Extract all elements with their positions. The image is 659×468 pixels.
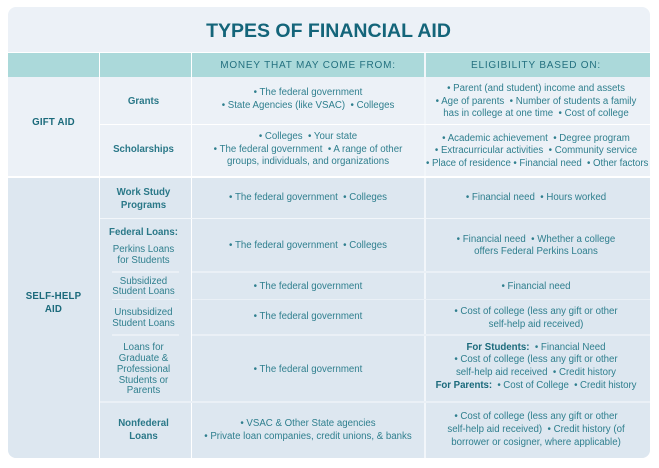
row: unsubsidized student loans: Student Loans — [112, 318, 175, 328]
row: scholarships: • Colleges • Your state — [259, 131, 357, 142]
row: federal loans, Perkins: • The federal government • Colleges — [229, 240, 387, 251]
row: nonfederal loans: borrower or cosigner, where applicable) — [451, 436, 621, 448]
row: loans for graduate and professional students or parents: For Parents: • Cost of College • Credit history — [436, 380, 636, 391]
row: federal loans, Perkins: for Students — [117, 254, 170, 266]
row: grants: • The federal government — [254, 87, 362, 98]
row: loans for graduate and professional students or parents: Professional — [117, 364, 170, 374]
row: work study programs — [116, 187, 606, 210]
row: federal loans, Perkins: Perkins Loans — [113, 244, 174, 255]
row: federal loans, Perkins: Federal Loans: — [109, 227, 178, 238]
row label: self-help aid: AID — [45, 304, 62, 315]
row: nonfederal loans: Loans — [129, 431, 158, 442]
row: grants: • Parent (and student) income and assets — [447, 82, 625, 94]
row: grants: • Age of parents • Number of students a family — [436, 96, 636, 106]
row: nonfederal loans: Nonfederal — [118, 418, 169, 429]
row: federal loans, Perkins — [109, 227, 615, 266]
row: unsubsidized student loans: Unsubsidized — [114, 306, 173, 318]
row: grants: has in college at one time • Cost of college — [443, 108, 629, 119]
row label: self-help aid: SELF-HELP — [26, 291, 81, 302]
row: work study programs: • The federal government • Colleges — [229, 192, 387, 203]
row: nonfederal loans: • Private loan companies, credit unions, & banks — [204, 431, 412, 442]
row: work study programs: Work Study — [117, 187, 170, 198]
row: loans for graduate and professional students or parents: Parents — [127, 385, 160, 396]
row: loans for graduate and professional students or parents: Graduate & — [119, 352, 168, 364]
row: work study programs: • Financial need • Hours worked — [466, 192, 606, 203]
panel: column header band — [8, 53, 650, 77]
row: loans for graduate and professional students or parents: self-help aid received • Credit history — [456, 367, 616, 378]
row: work study programs: Programs — [121, 200, 166, 210]
row: scholarships: • Extracurricular activities • Community service — [435, 145, 637, 156]
heading: eligibility based on: ELIGIBILITY BASED ON: — [471, 60, 601, 71]
row: loans for graduate and professional students or parents: Loans for — [123, 342, 164, 353]
row: scholarships: • Place of residence • Financial need • Other factors — [426, 158, 648, 169]
row: federal loans, Perkins: offers Federal Perkins Loans — [474, 246, 598, 257]
row: grants — [128, 82, 636, 119]
row: loans for graduate and professional students or parents: Students or — [119, 374, 168, 386]
row: subsidized student loans: • The federal government — [254, 281, 362, 292]
row: scholarships — [113, 131, 648, 169]
row: loans for graduate and professional students or parents: For Students: • Financial Need — [466, 342, 606, 352]
row: subsidized student loans: Subsidized — [120, 276, 167, 286]
row: federal loans, Perkins: • Financial need • Whether a college — [457, 234, 615, 244]
row: unsubsidized student loans: • Cost of college (less any gift or other — [454, 306, 618, 316]
row: unsubsidized student loans — [112, 306, 618, 330]
row: subsidized student loans — [112, 276, 571, 297]
title: TYPES OF FINANCIAL AID — [206, 20, 451, 42]
row label: self-help aid — [26, 291, 81, 315]
row: scholarships: • Academic achievement • Degree program — [442, 133, 630, 144]
heading: money that may come from: MONEY THAT MAY COME FROM: — [220, 60, 396, 71]
row: unsubsidized student loans: • The federal government — [254, 310, 362, 322]
panel: self-help section background — [8, 177, 650, 458]
row: grants: Grants — [128, 96, 159, 106]
row: loans for graduate and professional students or parents — [117, 342, 636, 396]
grid lines — [8, 52, 650, 53]
row: nonfederal loans: • VSAC & Other State agencies — [240, 418, 376, 429]
row: scholarships: • The federal government • A range of other — [214, 144, 402, 155]
row: loans for graduate and professional students or parents: • Cost of college (less any gift or other — [454, 354, 618, 365]
row: nonfederal loans: • Cost of college (less any gift or other — [454, 411, 618, 422]
row: grants: • State Agencies (like VSAC) • Colleges — [222, 100, 394, 111]
row: loans for graduate and professional students or parents: • The federal government — [254, 364, 362, 375]
row: nonfederal loans — [118, 411, 625, 448]
row: unsubsidized student loans: self-help aid received) — [489, 318, 583, 330]
row: nonfederal loans: self-help aid received) • Credit history (of — [447, 424, 625, 435]
row label: gift aid: GIFT AID — [32, 117, 75, 128]
row: subsidized student loans: • Financial need — [501, 281, 571, 292]
row: subsidized student loans: Student Loans — [112, 286, 175, 297]
row: scholarships: Scholarships — [113, 144, 174, 155]
row: scholarships: groups, individuals, and organizations — [227, 156, 389, 167]
